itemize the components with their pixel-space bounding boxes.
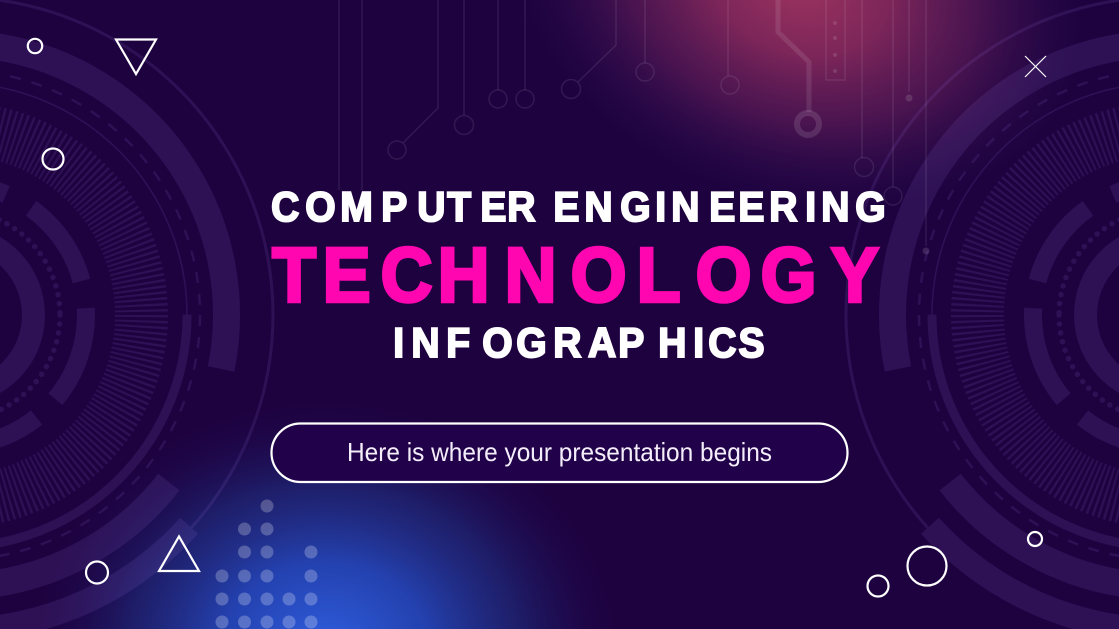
circuit traces [339,0,930,254]
icon: circle bottom left [86,562,108,584]
title line: infographics: INFOGRAPHICS [393,319,765,366]
icon: triangle [159,536,199,571]
title line: computer engineering: COMPUTER ENGINEERING [271,183,886,230]
title line: technology: TECHNOLOGY [272,232,879,318]
left circular tech dial [0,0,273,629]
icon: circle bottom right [868,576,888,596]
icon: small circle right [1028,532,1042,546]
icon: large circle [908,546,946,586]
icon: cross [1025,56,1046,77]
icon: circle left [42,148,64,170]
icon: inverted triangle [116,40,156,74]
subtitle pill: Here is where your presentation begins [347,437,772,467]
icon: small circle top left [28,39,42,53]
dot grid [216,500,318,628]
right circular tech dial [846,0,1119,629]
subtitle pill [272,424,848,482]
